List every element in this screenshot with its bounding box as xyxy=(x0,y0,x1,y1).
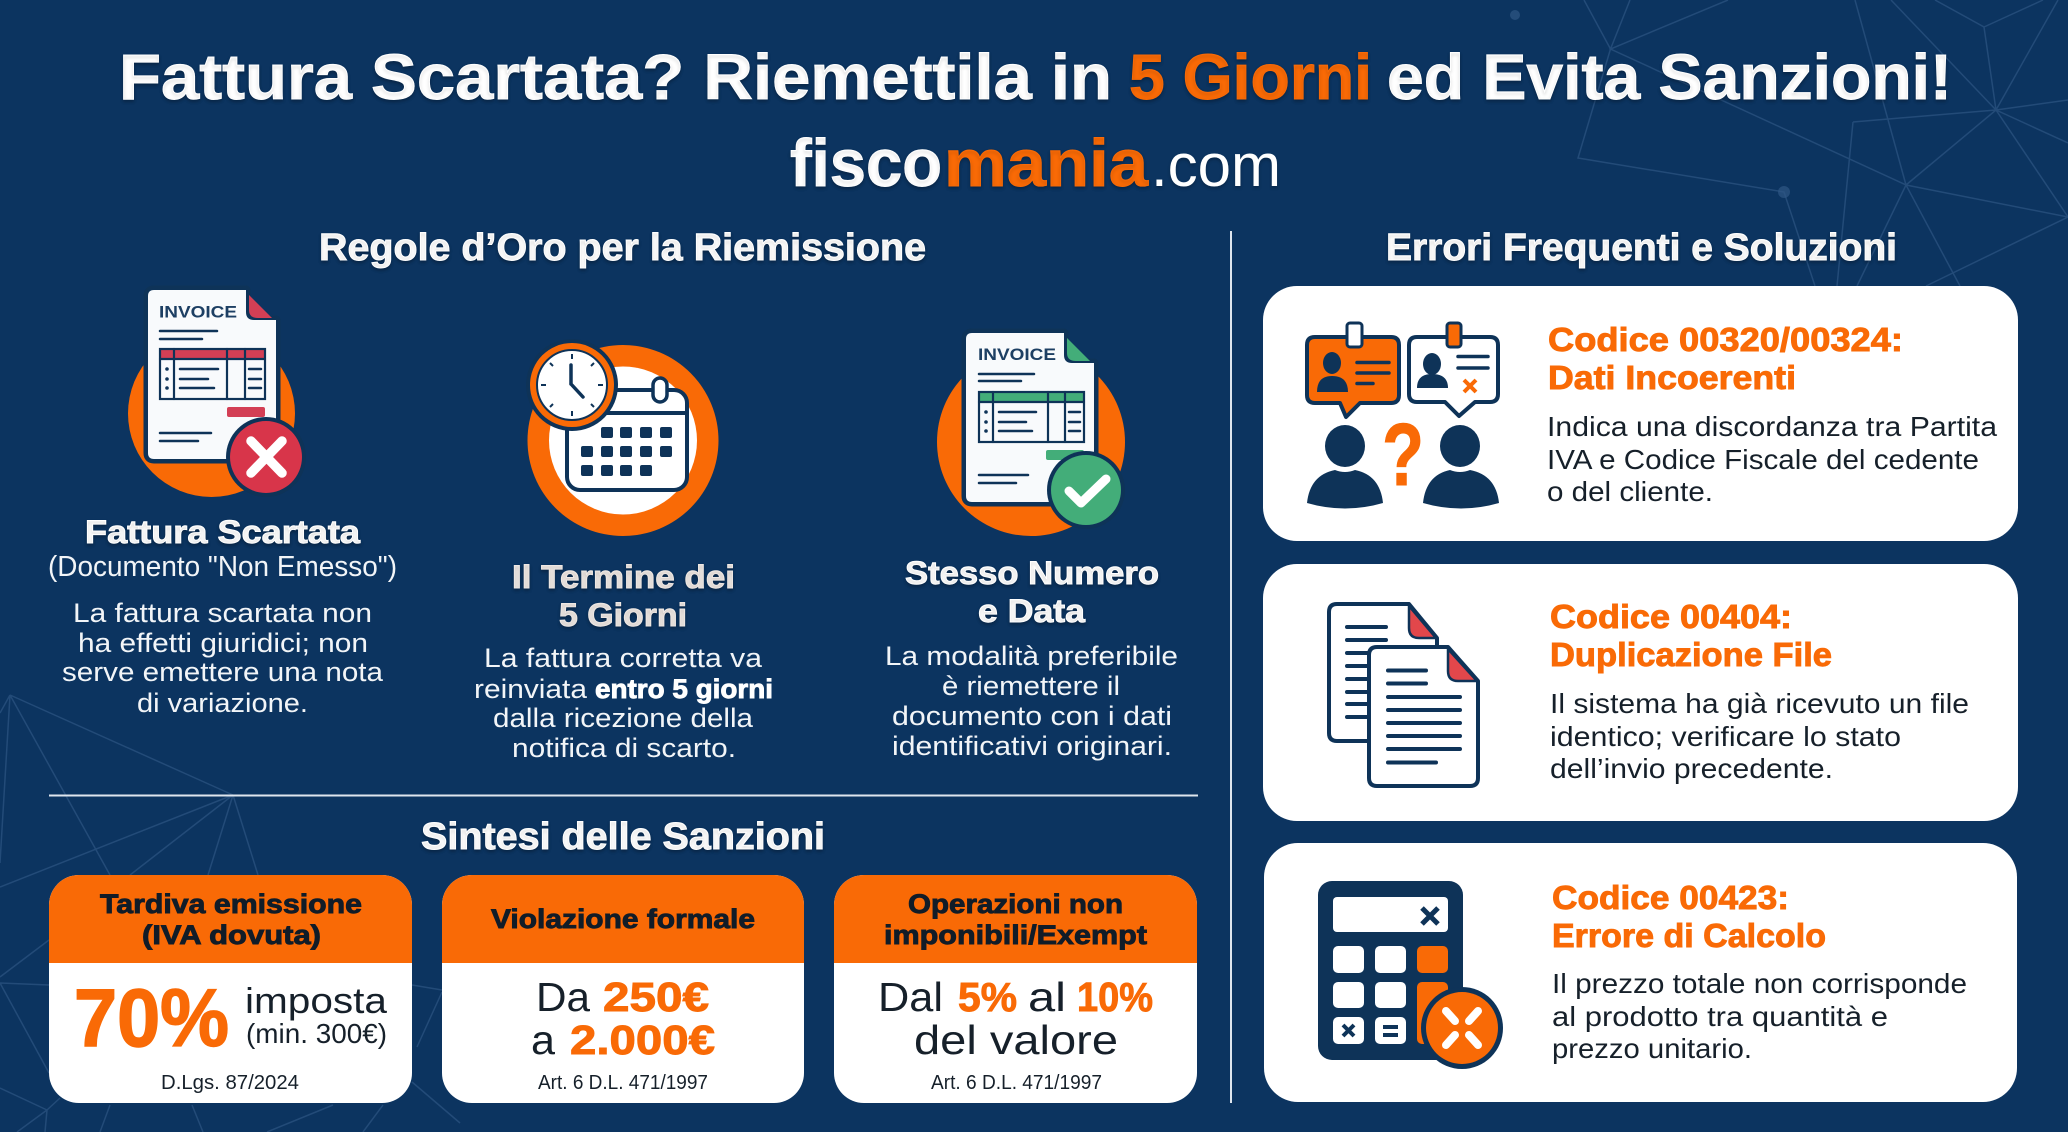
text block: Indica una discordanza tra Partita xyxy=(1547,411,1997,442)
card heading: Codice 00423: xyxy=(1552,879,1789,916)
value: 250 to 2000 euro: Da xyxy=(536,974,590,1020)
value: 5% to 10%: 5% xyxy=(958,974,1017,1020)
text block: entro 5 giorni xyxy=(595,674,773,704)
logo: fiscomania.com: mania xyxy=(944,126,1149,201)
text block: identificativi originari. xyxy=(892,731,1172,761)
card heading: imponibili/Exempt xyxy=(884,920,1147,950)
card heading: Errore di Calcolo xyxy=(1552,917,1826,954)
value: 5% to 10%: Dal xyxy=(878,974,943,1020)
text block: ha effetti giuridici; non xyxy=(78,628,368,658)
heading: Regole d'Oro: Regole d’Oro per la Riemissione xyxy=(319,227,926,269)
logo: fiscomania.com: .com xyxy=(1151,132,1281,199)
heading: Errori Frequenti: Errori Frequenti e Soluzioni xyxy=(1386,227,1897,269)
icon: clock and calendar xyxy=(526,339,718,536)
card heading: Duplicazione File xyxy=(1550,636,1832,673)
icon: inconsistent identity data: ? xyxy=(1382,405,1424,504)
text block: dell’invio precedente. xyxy=(1550,753,1833,784)
vertical divider xyxy=(1230,231,1232,1103)
text block xyxy=(474,643,773,763)
card heading xyxy=(1552,879,1826,954)
text block: identico; verificare lo stato xyxy=(1550,721,1901,752)
value detail xyxy=(245,980,388,1049)
icon: rejected invoice: INVOICE xyxy=(159,302,237,322)
value: 5% to 10%: del valore xyxy=(914,1017,1118,1063)
panel: codice 00320/00324 xyxy=(1263,286,2018,541)
heading: Il Termine dei 5 Giorni: Il Termine dei xyxy=(512,559,735,595)
value: 250 to 2000 euro: a xyxy=(531,1017,555,1063)
text block: serve emettere una nota xyxy=(62,657,384,687)
text block: Il sistema ha già ricevuto un file xyxy=(1550,688,1969,719)
source: Art. 6 D.L. 471/1997 xyxy=(538,1072,708,1094)
text block: prezzo unitario. xyxy=(1552,1033,1752,1064)
card heading: Tardiva emissione xyxy=(100,889,362,919)
text block: al prodotto tra quantità e xyxy=(1552,1001,1888,1032)
panel: Stesso Numero e Data xyxy=(885,333,1178,761)
value: 250 to 2000 euro xyxy=(531,974,715,1063)
heading: Stesso Numero e Data xyxy=(905,555,1159,629)
icon: rejected invoice xyxy=(128,290,306,497)
heading: Sintesi delle Sanzioni: Sintesi delle Sanzioni xyxy=(421,816,825,858)
logo: fiscomania.com: fisco xyxy=(790,126,942,201)
title xyxy=(119,41,1952,113)
horizontal divider xyxy=(49,794,1198,796)
text block: di variazione. xyxy=(137,688,308,718)
source: D.Lgs. 87/2024 xyxy=(161,1072,299,1094)
text block: La fattura scartata non xyxy=(73,598,372,628)
heading: Stesso Numero e Data: e Data xyxy=(978,593,1085,629)
card heading xyxy=(100,889,362,950)
source: Art. 6 D.L. 471/1997 xyxy=(931,1072,1102,1094)
text block: è riemettere il xyxy=(942,671,1120,701)
value: 70%: 70% xyxy=(74,973,229,1064)
heading: Il Termine dei 5 Giorni: 5 Giorni xyxy=(559,597,687,633)
text block: La modalità preferibile xyxy=(885,641,1178,671)
icon: inconsistent identity data xyxy=(1307,323,1499,508)
heading: Stesso Numero e Data: Stesso Numero xyxy=(905,555,1159,591)
subheading: (Documento "Non Emesso") xyxy=(48,551,397,583)
text block: IVA e Codice Fiscale del cedente xyxy=(1547,444,1979,475)
value: 250 to 2000 euro: 250€ xyxy=(603,974,709,1020)
title: Fattura Scartata? Riemettila in xyxy=(119,41,1112,113)
text block: documento con i dati xyxy=(892,701,1172,731)
text block xyxy=(1550,688,1969,784)
heading: Il Termine dei 5 Giorni xyxy=(512,559,735,633)
text block: o del cliente. xyxy=(1547,476,1713,507)
card heading xyxy=(1550,598,1832,673)
title: 5 Giorni xyxy=(1129,41,1372,113)
panel: Il Termine dei 5 Giorni xyxy=(474,339,773,763)
value detail: (min. 300€) xyxy=(246,1018,387,1049)
text block xyxy=(1552,968,1967,1064)
text block: Il prezzo totale non corrisponde xyxy=(1552,968,1967,999)
value: 5% to 10%: 10% xyxy=(1077,974,1153,1020)
logo: fiscomania.com xyxy=(790,126,1281,201)
panel: violazione formale xyxy=(442,875,804,1103)
text block xyxy=(62,598,384,718)
title: ed Evita Sanzioni! xyxy=(1387,41,1952,113)
card heading: (IVA dovuta) xyxy=(142,920,321,950)
text block xyxy=(1547,411,1997,507)
card heading xyxy=(1548,321,1903,396)
card heading: Dati Incoerenti xyxy=(1548,359,1796,396)
value: 5% to 10%: al xyxy=(1028,974,1066,1020)
panel: operazioni non imponibili xyxy=(834,875,1197,1103)
icon: approved invoice xyxy=(937,333,1125,536)
panel: codice 00423 xyxy=(1264,843,2017,1102)
panel: Fattura Scartata xyxy=(48,290,397,718)
card heading: Operazioni non xyxy=(908,889,1123,919)
text block: notifica di scarto. xyxy=(512,733,736,763)
icon: duplicate documents xyxy=(1329,604,1478,786)
value detail: imposta xyxy=(245,980,388,1021)
value: 250 to 2000 euro: 2.000€ xyxy=(570,1017,715,1063)
panel: codice 00404 xyxy=(1263,564,2018,821)
card heading xyxy=(884,889,1147,950)
value: 5% to 10% xyxy=(878,974,1153,1063)
panel: sanzione tardiva emissione xyxy=(49,875,412,1103)
card heading: Codice 00320/00324: xyxy=(1548,321,1903,358)
icon: calculator with error xyxy=(1318,881,1503,1069)
text block xyxy=(885,641,1178,761)
text block: dalla ricezione della xyxy=(493,703,754,733)
text block: La fattura corretta va xyxy=(484,643,763,673)
card heading: Codice 00404: xyxy=(1550,598,1792,635)
icon: approved invoice: INVOICE xyxy=(978,345,1056,364)
card heading: Violazione formale xyxy=(491,904,755,934)
text block: reinviata xyxy=(474,674,588,704)
heading: Fattura Scartata: Fattura Scartata xyxy=(85,514,360,550)
